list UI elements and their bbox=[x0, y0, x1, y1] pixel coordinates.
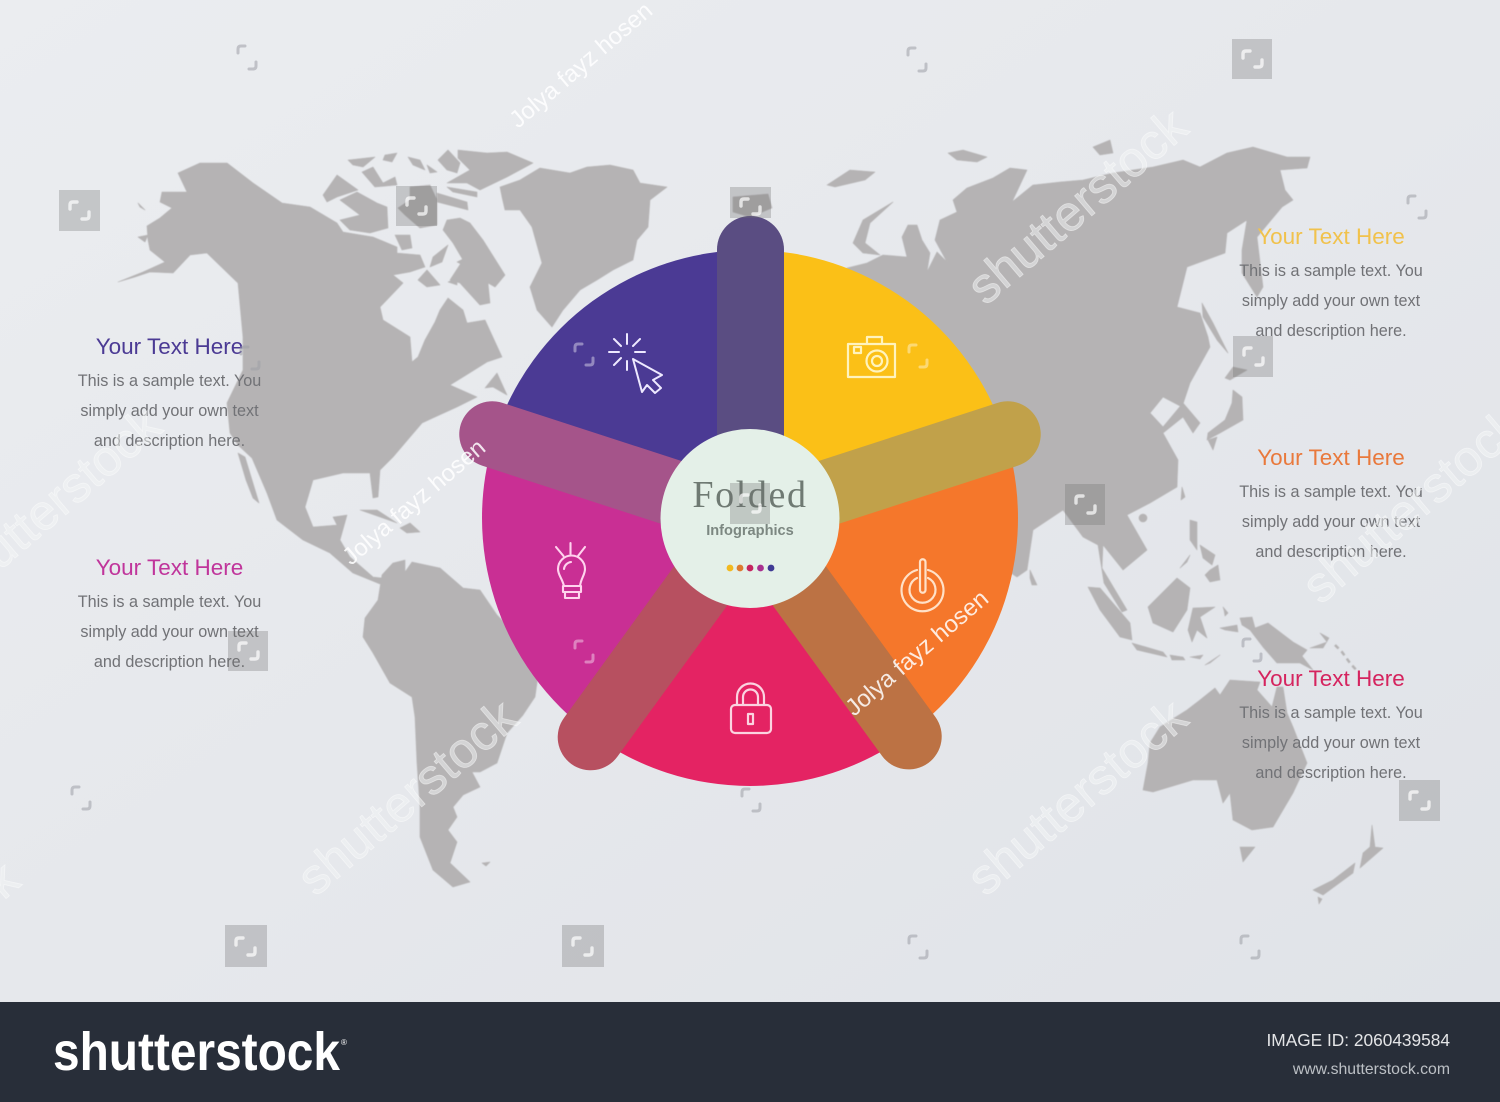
title: Your Text Here bbox=[1257, 666, 1405, 691]
footer background bbox=[0, 1002, 1500, 1102]
body: and description here. bbox=[94, 653, 245, 671]
bar: brown bbox=[723, 499, 955, 783]
watermark: shutterstock diagonal text: shutterstock bbox=[286, 688, 528, 906]
colour dots bbox=[727, 565, 774, 571]
map: pacific islands bbox=[1310, 633, 1358, 672]
center disc with title bbox=[660, 429, 840, 608]
watermark: author name: Jolya fayz hosen bbox=[337, 434, 491, 571]
wheel: five coloured sectors bbox=[482, 250, 1018, 786]
map: novaya zemlya bbox=[853, 202, 893, 255]
map: eurasia bbox=[800, 147, 1310, 612]
heading: Folded: Folded bbox=[692, 474, 808, 516]
body: and description here. bbox=[1255, 543, 1407, 561]
map: northern islands bbox=[827, 140, 1113, 187]
map: south america bbox=[363, 560, 540, 887]
body: This is a sample text. You bbox=[1239, 704, 1423, 722]
footer trademark: ® bbox=[341, 1038, 347, 1047]
sector: yellow bbox=[750, 250, 1005, 518]
sector: orange bbox=[750, 435, 1018, 735]
watermark: author name bbox=[337, 0, 994, 722]
bar: dark violet bbox=[717, 216, 784, 518]
body: This is a sample text. You bbox=[78, 593, 261, 611]
icon: cursor click bbox=[609, 334, 662, 393]
map: baja california bbox=[238, 453, 259, 503]
bar: rose bbox=[545, 499, 777, 783]
watermark grey squares bbox=[59, 39, 1440, 967]
body bbox=[1239, 262, 1423, 340]
icon: light bulb bbox=[556, 543, 585, 598]
text block: left top bbox=[78, 334, 261, 450]
map: australia bbox=[1143, 680, 1307, 830]
watermark small logos bbox=[72, 46, 1426, 958]
map: japan and east asian islands bbox=[1030, 303, 1247, 585]
bar: ochre bbox=[740, 393, 1049, 549]
world map bbox=[118, 140, 1383, 904]
icon: camera bbox=[848, 337, 895, 377]
center disc bbox=[660, 429, 840, 608]
map: greenland bbox=[500, 165, 667, 327]
text block: right bottom bbox=[1239, 666, 1423, 782]
bar: mauve bbox=[451, 393, 760, 549]
title: Your Text Here bbox=[1257, 224, 1405, 249]
footer logo: shutterstock bbox=[53, 1022, 341, 1082]
map: tasmania bbox=[1240, 847, 1255, 862]
text block: right middle bbox=[1239, 445, 1423, 561]
sector: blue bbox=[495, 250, 750, 518]
body: and description here. bbox=[94, 432, 245, 450]
watermark: author name: Jolya fayz hosen bbox=[504, 0, 658, 134]
body: simply add your own text bbox=[1242, 513, 1421, 531]
icon: power button bbox=[902, 559, 944, 611]
body: and description here. bbox=[1255, 764, 1407, 782]
text block: left bottom bbox=[78, 555, 261, 671]
body: and description here. bbox=[1255, 322, 1407, 340]
map: new guinea bbox=[1240, 617, 1313, 670]
body: simply add your own text bbox=[1242, 734, 1421, 752]
title: Your Text Here bbox=[96, 555, 243, 580]
body: simply add your own text bbox=[80, 623, 259, 641]
icon: padlock bbox=[731, 684, 771, 733]
body: simply add your own text bbox=[1242, 292, 1421, 310]
subheading: Infographics: Infographics bbox=[706, 523, 794, 539]
watermark: shutterstock diagonal text: shutterstock bbox=[956, 688, 1198, 906]
footer website: www.shutterstock.com bbox=[1292, 1061, 1450, 1078]
title: Your Text Here bbox=[1257, 445, 1405, 470]
footer image id: IMAGE ID: 2060439584 bbox=[1266, 1030, 1450, 1050]
watermark: shutterstock diagonal text: shutterstock bbox=[956, 97, 1198, 315]
body: This is a sample text. You bbox=[78, 372, 261, 390]
map: new zealand bbox=[1313, 825, 1383, 904]
body: This is a sample text. You bbox=[1239, 262, 1423, 280]
map: caribbean and small islands bbox=[138, 194, 772, 866]
watermark: author name: Jolya fayz hosen bbox=[840, 585, 994, 722]
body bbox=[1239, 483, 1423, 561]
body: This is a sample text. You bbox=[1239, 483, 1423, 501]
text block: right top bbox=[1239, 224, 1423, 340]
title: Your Text Here bbox=[96, 334, 243, 359]
map: north america bbox=[118, 163, 502, 584]
body bbox=[1239, 704, 1423, 782]
body bbox=[78, 593, 261, 671]
footer bar bbox=[0, 1002, 1500, 1102]
map: southeast asia bbox=[1088, 520, 1238, 665]
sector: magenta bbox=[482, 435, 750, 735]
body bbox=[78, 372, 261, 450]
sector: crimson bbox=[592, 518, 908, 786]
body: simply add your own text bbox=[80, 402, 259, 420]
map: arctic islands bbox=[323, 150, 533, 305]
fold bars bbox=[451, 216, 1049, 783]
